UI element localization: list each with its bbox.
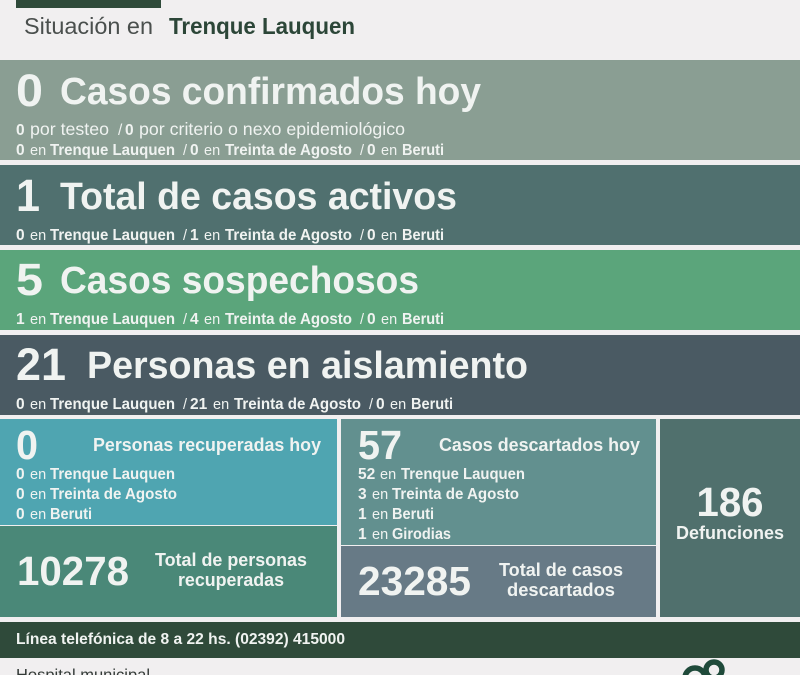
panel: total de casos activos: / <box>183 228 188 244</box>
panel: personas en aislamiento: Beruti <box>411 396 453 413</box>
panel: casos sospechosos: Trenque Lauquen <box>50 311 175 328</box>
icon: logo <box>685 662 722 675</box>
panel: personas recuperadas hoy: 0 <box>16 486 25 503</box>
panel: defunciones <box>660 419 800 617</box>
panel: casos confirmados hoy: 0 <box>367 142 376 159</box>
panel: casos confirmados hoy: / <box>360 143 365 159</box>
panel: total de casos activos: en <box>204 228 220 244</box>
panel: total de casos activos: 0 <box>16 227 25 244</box>
panel: personas recuperadas hoy: 0 <box>16 506 25 523</box>
panel: personas recuperadas hoy: Treinta de Agosto <box>50 486 177 503</box>
panel: casos sospechosos: 5 <box>16 254 43 305</box>
panel: casos confirmados hoy: 0 <box>16 122 25 139</box>
panel: casos descartados hoy: en <box>372 487 388 503</box>
panel: defunciones: 186 <box>696 479 764 525</box>
panel: casos confirmados hoy: 0 <box>16 142 25 159</box>
panel: casos sospechosos: / <box>360 312 365 328</box>
panel: total de personas recuperadas <box>0 526 337 617</box>
panel: personas en aislamiento: 0 <box>16 396 25 413</box>
panel: total de casos descartados: 23285 <box>358 558 471 604</box>
panel: total de casos activos: 0 <box>367 227 376 244</box>
panel: casos descartados hoy: Trenque Lauquen <box>401 466 525 483</box>
panel: total de casos activos: Treinta de Agosto <box>225 227 352 244</box>
footer: telephone line <box>0 622 800 658</box>
footer: telephone line: Línea telefónica de 8 a 22 hs. (02392) 415000 <box>16 631 345 648</box>
header: location title: Trenque Lauquen <box>169 13 355 39</box>
panel: total de casos activos: Total de casos activos <box>60 176 457 218</box>
panel: casos descartados hoy: Beruti <box>392 506 434 523</box>
panel: casos confirmados hoy: Casos confirmados hoy <box>60 71 481 113</box>
panel: personas en aislamiento: / <box>183 397 188 413</box>
panel: casos confirmados hoy: 0 <box>16 65 43 116</box>
panel: personas recuperadas hoy: 0 <box>16 422 38 468</box>
panel: personas en aislamiento: Personas en aislamiento <box>87 345 528 387</box>
panel: total de casos activos: en <box>381 228 397 244</box>
panel: casos confirmados hoy <box>0 60 800 160</box>
panel: casos sospechosos: 0 <box>367 311 376 328</box>
panel: personas en aislamiento <box>0 335 800 415</box>
panel: personas en aislamiento: / <box>369 397 374 413</box>
panel: total de casos descartados: Total de casos <box>499 559 623 580</box>
panel: casos confirmados hoy: Treinta de Agosto <box>225 142 352 159</box>
panel: casos descartados hoy <box>341 419 656 545</box>
panel: personas recuperadas hoy: en <box>30 487 46 503</box>
panel: defunciones: Defunciones <box>676 522 784 543</box>
panel: personas en aislamiento: Trenque Lauquen <box>50 396 175 413</box>
panel: personas recuperadas hoy: Trenque Lauquen <box>50 466 175 483</box>
panel: casos descartados hoy: 52 <box>358 466 375 483</box>
panel: personas recuperadas hoy: 0 <box>16 466 25 483</box>
panel: personas en aislamiento: en <box>390 397 406 413</box>
panel: casos descartados hoy: en <box>372 507 388 523</box>
panel: casos sospechosos: / <box>183 312 188 328</box>
panel: total de casos activos: Beruti <box>402 227 444 244</box>
panel: total de casos activos: 1 <box>16 170 40 221</box>
panel: total de personas recuperadas: Total de personas <box>155 549 307 570</box>
panel: casos sospechosos: Beruti <box>402 311 444 328</box>
panel: casos confirmados hoy: en <box>381 143 397 159</box>
panel: total de casos activos <box>0 165 800 245</box>
panel: personas recuperadas hoy: Personas recuperadas hoy <box>93 434 322 455</box>
panel: casos sospechosos: 1 <box>16 311 25 328</box>
panel: personas en aislamiento: 21 <box>16 339 66 390</box>
panel: casos confirmados hoy: en <box>30 143 46 159</box>
panel: casos descartados hoy: en <box>372 527 388 543</box>
panel: casos descartados hoy: Girodias <box>392 526 451 543</box>
panel: casos descartados hoy: 1 <box>358 526 367 543</box>
panel: casos sospechosos: en <box>204 312 220 328</box>
panel: casos sospechosos: Casos sospechosos <box>60 260 419 302</box>
panel: casos descartados hoy: 1 <box>358 506 367 523</box>
header: location title <box>16 0 355 39</box>
panel: casos confirmados hoy: en <box>204 143 220 159</box>
panel: casos confirmados hoy: 0 <box>125 122 134 139</box>
panel: casos sospechosos <box>0 250 800 330</box>
panel: casos confirmados hoy: 0 <box>190 142 199 159</box>
panel: casos descartados hoy: Treinta de Agosto <box>392 486 519 503</box>
panel: casos confirmados hoy: Trenque Lauquen <box>50 142 175 159</box>
panel: casos sospechosos: en <box>381 312 397 328</box>
panel: casos descartados hoy: 57 <box>358 422 402 468</box>
panel: casos sospechosos: Treinta de Agosto <box>225 311 352 328</box>
panel: total de casos activos: en <box>30 228 46 244</box>
panel: personas en aislamiento: 0 <box>376 396 385 413</box>
panel: personas en aislamiento: en <box>213 397 229 413</box>
panel: total de casos descartados <box>341 546 656 617</box>
panel: personas en aislamiento: 21 <box>190 396 208 413</box>
panel: total de personas recuperadas: 10278 <box>17 548 129 594</box>
panel: casos sospechosos: 4 <box>190 311 199 328</box>
panel: casos confirmados hoy: por testeo <box>30 119 109 139</box>
panel: personas recuperadas hoy: Beruti <box>50 506 92 523</box>
panel: casos descartados hoy: Casos descartados hoy <box>439 434 641 455</box>
panel: personas en aislamiento: en <box>30 397 46 413</box>
panel: total de casos descartados: descartados <box>507 579 615 600</box>
panel: casos confirmados hoy: / <box>183 143 188 159</box>
panel: personas en aislamiento: Treinta de Agosto <box>234 396 361 413</box>
panel: total de casos activos: 1 <box>190 227 199 244</box>
panel: casos confirmados hoy: por criterio o nexo epidemiológico <box>139 119 405 139</box>
panel: total de personas recuperadas: recuperadas <box>178 569 284 590</box>
panel: casos descartados hoy: en <box>380 467 396 483</box>
panel: personas recuperadas hoy <box>0 419 337 525</box>
panel: casos descartados hoy: 3 <box>358 486 367 503</box>
panel: personas recuperadas hoy: en <box>30 467 46 483</box>
header: location title: Situación en <box>24 13 153 39</box>
panel: casos confirmados hoy: / <box>118 122 123 139</box>
panel: casos confirmados hoy: Beruti <box>402 142 444 159</box>
panel: casos sospechosos: en <box>30 312 46 328</box>
panel: total de casos activos: Trenque Lauquen <box>50 227 175 244</box>
panel: personas recuperadas hoy: en <box>30 507 46 523</box>
panel: total de casos activos: / <box>360 228 365 244</box>
